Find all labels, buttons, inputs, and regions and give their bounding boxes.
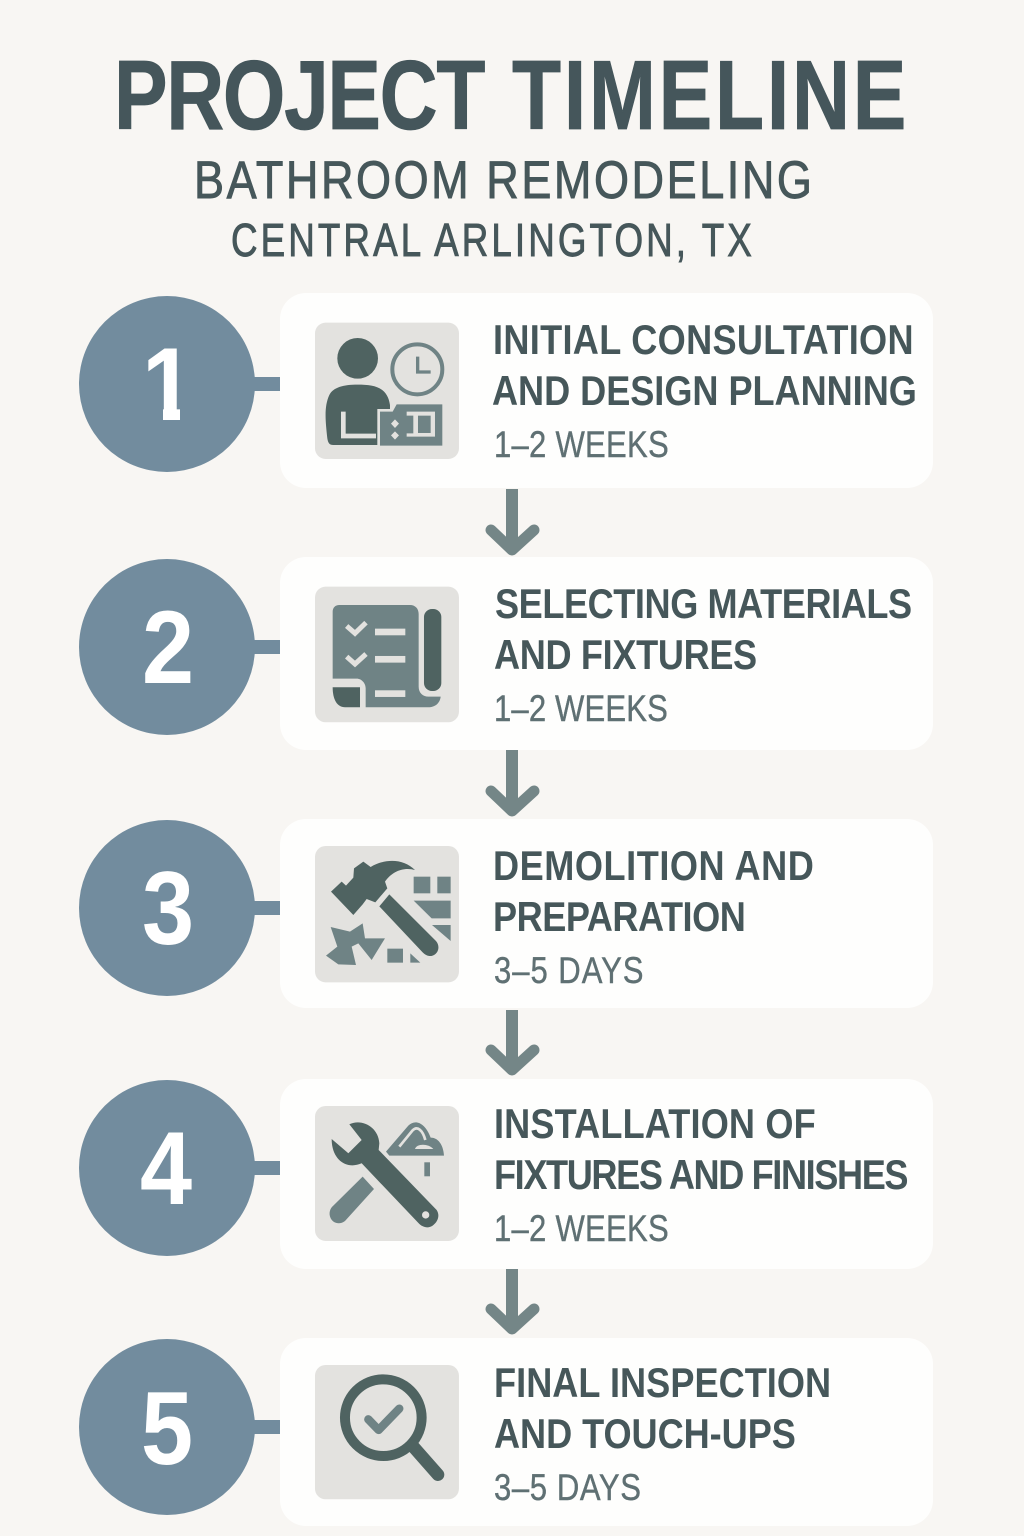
title: TIMELINE: [512, 40, 906, 150]
icon: demolition: [315, 846, 459, 982]
connector 4: [250, 1161, 282, 1175]
step 5: [79, 1338, 933, 1526]
title: [114, 40, 906, 150]
heading 2: [494, 582, 912, 679]
step 2: [79, 557, 933, 750]
number badge 1: [79, 296, 255, 472]
step 4: [79, 1079, 933, 1269]
card 2: [280, 557, 933, 750]
arrow: step 1 to 2: [491, 489, 534, 550]
connector 5: [250, 1420, 282, 1434]
number badge 2: 2: [142, 588, 194, 705]
number badge 3: 3: [142, 849, 194, 966]
heading 5: [494, 1361, 831, 1458]
card 3: [280, 819, 933, 1008]
duration 2: 1–2 WEEKS: [494, 689, 668, 730]
heading 2: SELECTING MATERIALS: [495, 582, 912, 628]
heading 1: INITIAL CONSULTATION: [493, 318, 914, 364]
title: PROJECT: [114, 40, 485, 150]
step 3: [79, 819, 933, 1008]
connector 2: [250, 640, 282, 654]
card 5: [280, 1338, 933, 1526]
duration 4: 1–2 WEEKS: [494, 1209, 669, 1250]
duration 3: 3–5 DAYS: [494, 951, 644, 992]
connector 1: [250, 377, 282, 391]
heading 5: AND TOUCH-UPS: [494, 1412, 796, 1458]
heading 1: AND DESIGN PLANNING: [492, 369, 917, 415]
number badge 5: [79, 1339, 255, 1515]
number badge 5: 5: [141, 1369, 193, 1486]
subtitle: bathroom remodeling: BATHROOM REMODELING: [194, 151, 812, 210]
heading 1: [492, 318, 917, 415]
icon: checklist: [315, 587, 459, 722]
heading 2: AND FIXTURES: [494, 633, 757, 679]
heading 4: FIXTURES AND FINISHES: [494, 1153, 909, 1199]
number badge 4: 4: [140, 1109, 192, 1226]
icon: tools: [315, 1106, 459, 1241]
heading 4: [494, 1102, 909, 1199]
heading 3: [493, 844, 814, 941]
card 1: [280, 293, 933, 488]
subtitle: location: CENTRAL ARLINGTON, TX: [231, 214, 752, 266]
number badge 4: [79, 1080, 255, 1256]
duration 5: 3–5 DAYS: [494, 1468, 641, 1509]
icon: consultation: [315, 323, 459, 459]
heading 3: DEMOLITION AND: [493, 844, 814, 890]
heading 5: FINAL INSPECTION: [494, 1361, 831, 1407]
arrow: step 2 to 3: [491, 750, 534, 811]
duration 1: 1–2 WEEKS: [494, 425, 669, 466]
icon: inspection: [315, 1365, 459, 1499]
heading 4: INSTALLATION OF: [494, 1102, 816, 1148]
number badge 3: [79, 820, 255, 996]
card 4: [280, 1079, 933, 1269]
number badge 2: [79, 559, 255, 735]
number badge 1: 1: [142, 325, 194, 442]
heading 3: PREPARATION: [493, 895, 746, 941]
arrow: step 3 to 4: [491, 1010, 534, 1070]
arrow: step 4 to 5: [491, 1269, 534, 1329]
connector 3: [250, 901, 282, 915]
step 1: [79, 293, 933, 488]
